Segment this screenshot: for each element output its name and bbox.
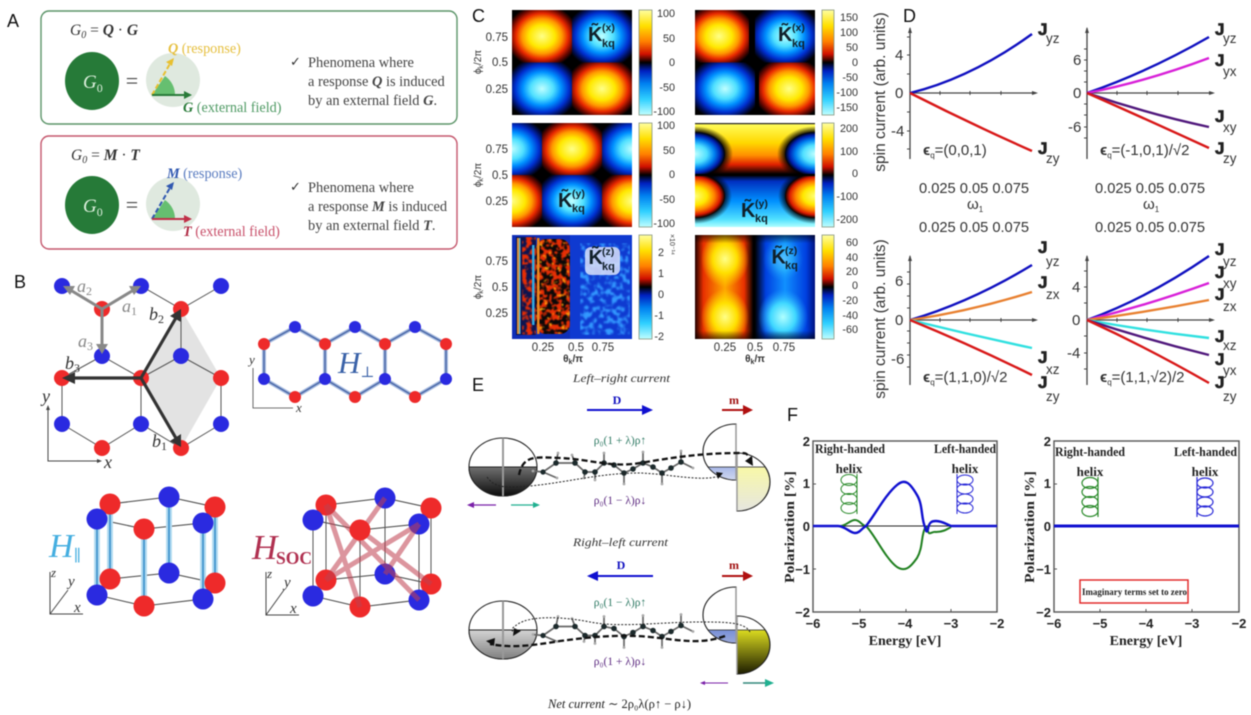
- card: electric-type response: =: [86, 22, 103, 39]
- left-right current diagram: D: [613, 393, 622, 407]
- heatmap: K y, left: K̃: [558, 188, 573, 212]
- plot: eq (-1,0,1)/sqrt2: [1068, 20, 1237, 166]
- plot: eq (1,1,0)/sqrt2: zy: [1046, 389, 1060, 404]
- omega tick labels and axis: 1: [979, 205, 984, 214]
- phi axis titles: k: [478, 65, 485, 69]
- H parallel bilayer: z: [50, 565, 56, 580]
- polarization plot, full: 1: [803, 476, 810, 491]
- card: magnetic-type response: 0: [97, 205, 103, 219]
- plot: eq (-1,0,1)/sqrt2: yz: [1223, 31, 1237, 46]
- polarization plot, imaginary terms zero: −2: [1036, 605, 1051, 620]
- H perpendicular lattice: [247, 321, 452, 415]
- plot: eq (0,0,1): -4: [891, 123, 904, 140]
- colorbar labels: 50: [663, 145, 675, 157]
- colorbar labels: 100: [657, 8, 675, 20]
- honeycomb lattice with lattice vectors: 2: [158, 312, 164, 326]
- plot: eq (-1,0,1)/sqrt2: yx: [1223, 64, 1237, 79]
- card: electric-type response: G (external field): [183, 100, 282, 116]
- card: magnetic-type response: by an external field T.: [308, 218, 435, 234]
- plot: eq (-1,0,1)/sqrt2: -6: [1068, 119, 1081, 136]
- plot: eq (0,0,1): 4: [895, 47, 903, 64]
- colorbar labels: -1: [654, 310, 664, 322]
- omega tick labels and axis: 0.025 0.05 0.075: [919, 219, 1029, 236]
- C axes labels: 0.5: [492, 57, 508, 69]
- colorbar labels: 0: [852, 168, 858, 180]
- phi axis titles: ϕ: [473, 294, 484, 299]
- colorbar labels: 40: [846, 252, 858, 264]
- net current formula: Net current ∼ 2ρ₀λ(ρ↑ − ρ↓): [547, 697, 691, 711]
- colorbar labels: 0: [669, 169, 675, 181]
- plot: eq (1,1,0)/sqrt2: q: [930, 378, 935, 387]
- card: electric-type response: G: [70, 22, 81, 39]
- colorbar labels: 20: [846, 266, 858, 278]
- H parallel bilayer: y: [66, 574, 75, 590]
- polarization plot, full: −5: [852, 616, 866, 631]
- plot: eq (1,1,sqrt2)/2: =(1,1,√2)/2: [1112, 369, 1184, 386]
- polarization plot, imaginary terms zero: −5: [1093, 616, 1107, 631]
- colorbar labels: 100: [657, 120, 675, 132]
- plot: eq (1,1,sqrt2)/2: J: [1215, 263, 1224, 282]
- honeycomb lattice with lattice vectors: 1: [131, 304, 137, 318]
- plot: eq (1,1,0)/sqrt2: 0: [895, 312, 903, 329]
- plot: eq (1,1,sqrt2)/2: 4: [1072, 279, 1080, 296]
- colorbar labels: -50: [659, 82, 675, 94]
- colorbars: [639, 10, 834, 339]
- plot: eq (1,1,sqrt2)/2: ϵ: [1100, 369, 1107, 386]
- phi axis titles: [473, 50, 485, 299]
- card: electric-type response: =: [126, 68, 138, 93]
- theta axis titles: /π: [572, 354, 583, 365]
- colorbar labels: -200: [836, 214, 858, 226]
- omega tick labels and axis: ω: [967, 196, 979, 213]
- label F: F: [787, 405, 798, 425]
- heatmap: K z, right: (z): [785, 245, 797, 257]
- C axes labels: 0.5: [492, 282, 508, 294]
- honeycomb lattice with lattice vectors: 3: [74, 361, 80, 375]
- theta axis titles: /π: [754, 354, 765, 365]
- plot: eq (1,1,0)/sqrt2: J: [1038, 273, 1047, 292]
- theta axis titles: [563, 354, 765, 366]
- left-right current diagram: ρ₀(1 + λ)ρ↑: [594, 435, 646, 447]
- plot: eq (1,1,sqrt2)/2: zx: [1223, 299, 1237, 314]
- plot: eq (0,0,1): =(0,0,1): [935, 142, 987, 159]
- plot: eq (0,0,1): J: [1038, 139, 1047, 158]
- card: electric-type response: 0: [97, 81, 103, 95]
- left-right current diagram: [467, 371, 770, 511]
- polarization plot, imaginary terms zero: −4: [1139, 616, 1154, 631]
- colorbar labels: -100: [653, 106, 675, 118]
- heatmap: K y, right: [694, 122, 816, 228]
- heatmap: K x, right: K̃: [778, 22, 793, 46]
- polarization plot, full: −2: [990, 616, 1004, 631]
- phi axis titles: k: [478, 178, 485, 182]
- plot: eq (0,0,1): [891, 20, 1060, 166]
- heatmap: K x, left: K̃: [588, 22, 603, 46]
- colorbar labels: -40: [842, 310, 858, 322]
- colorbar labels: [653, 8, 858, 343]
- polarization plot, full: Right-handed: [815, 441, 886, 456]
- C axes labels: 0.75: [486, 32, 508, 44]
- C axes labels: 0.25: [486, 196, 508, 208]
- plot: eq (0,0,1): J: [1038, 20, 1047, 39]
- label E: E: [472, 375, 484, 395]
- colorbar labels: 0: [658, 289, 664, 301]
- card: electric-type response: Q (response): [168, 41, 241, 57]
- card: magnetic-type response: T (external field): [183, 224, 280, 240]
- heatmap: K x, right: (x): [792, 22, 805, 34]
- colorbar labels: -50: [842, 72, 858, 84]
- colorbar labels: -20: [842, 295, 858, 307]
- polarization plot, full: −4: [898, 616, 913, 631]
- honeycomb lattice with lattice vectors: [40, 276, 229, 472]
- card: magnetic-type response: [41, 136, 457, 249]
- heatmap: K z, right: kq: [785, 260, 798, 272]
- phi axis titles: /2π: [473, 50, 484, 65]
- card: electric-type response: [41, 11, 457, 124]
- plot: eq (-1,0,1)/sqrt2: q: [1107, 151, 1112, 160]
- card: magnetic-type response: a response M is induced: [308, 199, 447, 215]
- plot: eq (-1,0,1)/sqrt2: =(-1,0,1)/√2: [1112, 142, 1190, 159]
- C axes labels: 0.25: [486, 308, 508, 320]
- phi axis titles: ϕ: [473, 182, 484, 187]
- plot: eq (-1,0,1)/sqrt2: 6: [1073, 52, 1081, 69]
- card: magnetic-type response: G: [83, 196, 97, 217]
- card: electric-type response: G: [83, 72, 97, 93]
- card: magnetic-type response: ✓: [290, 180, 301, 195]
- colorbar labels: 0: [852, 280, 858, 292]
- heatmap: K y, left: kq: [572, 203, 585, 215]
- card: electric-type response: 0: [81, 30, 86, 41]
- theta axis titles: θ: [563, 354, 569, 365]
- polarization plot, full: helix: [836, 461, 863, 476]
- phi axis titles: /2π: [473, 163, 484, 178]
- polarization plot, full: −2: [795, 605, 810, 620]
- polarization plot, imaginary terms zero: −6: [1047, 616, 1061, 631]
- colorbar labels: -100: [836, 87, 858, 99]
- heatmap: K x, right: [694, 9, 816, 116]
- colorbar labels: 200: [840, 123, 858, 135]
- plot: eq (1,1,sqrt2)/2: zy: [1223, 389, 1237, 404]
- colorbar labels: 150: [840, 12, 858, 24]
- colorbar labels: 60: [846, 237, 858, 249]
- heatmap: K x, right: kq: [792, 38, 805, 50]
- honeycomb lattice with lattice vectors: b: [65, 353, 74, 373]
- plot: eq (1,1,sqrt2)/2: yx: [1223, 363, 1237, 378]
- heatmap: K y, right: kq: [755, 213, 768, 225]
- plot: eq (-1,0,1)/sqrt2: J: [1215, 107, 1224, 126]
- honeycomb lattice with lattice vectors: 2: [86, 284, 92, 298]
- plot: eq (-1,0,1)/sqrt2: J: [1215, 139, 1224, 158]
- plot: eq (0,0,1): ϵ: [923, 142, 930, 159]
- omega tick labels and axis: 1: [1155, 205, 1160, 214]
- heatmap: K z, right: [694, 234, 816, 340]
- theta axis labels: 0.75: [773, 342, 795, 354]
- card: magnetic-type response: M · T: [104, 147, 140, 164]
- heatmap: K z, noisy: [511, 234, 633, 340]
- H perpendicular lattice: ⊥: [360, 365, 374, 381]
- colorbar labels: -50: [659, 194, 675, 206]
- heatmap: K x, left: (x): [602, 22, 615, 34]
- right-left current diagram: m: [729, 558, 739, 572]
- card: electric-type response: a response Q is induced: [308, 74, 445, 90]
- right-left current diagram: Right–left current: [572, 535, 669, 549]
- H spin-orbit coupling bilayer: x: [289, 601, 297, 617]
- panel E: [467, 371, 774, 711]
- polarization plot, full: 0: [803, 519, 810, 534]
- honeycomb lattice with lattice vectors: a: [77, 276, 86, 296]
- polarization plot, imaginary terms zero: −1: [1036, 562, 1051, 577]
- honeycomb lattice with lattice vectors: y: [40, 386, 50, 406]
- card: electric-type response: Q · G: [103, 22, 138, 39]
- C axes labels: 0.5: [492, 170, 508, 182]
- plot: eq (-1,0,1)/sqrt2: 0: [1073, 85, 1081, 102]
- plot: eq (-1,0,1)/sqrt2: J: [1215, 51, 1224, 70]
- plot: eq (0,0,1): q: [930, 151, 935, 160]
- card: electric-type response: Phenomena where: [308, 55, 414, 71]
- panel B: [14, 272, 452, 618]
- polarization plot, full: Energy [eV]: [869, 634, 941, 649]
- left-right current diagram: m: [729, 393, 739, 407]
- theta axis labels: 0.75: [592, 342, 614, 354]
- H parallel bilayer: H: [49, 528, 74, 565]
- honeycomb lattice with lattice vectors: 3: [87, 339, 93, 353]
- plot: eq (-1,0,1)/sqrt2: xy: [1223, 120, 1237, 135]
- omega tick labels and axis: 0.025 0.05 0.075: [919, 180, 1029, 197]
- polarization plot, full: −3: [944, 616, 958, 631]
- honeycomb lattice with lattice vectors: a: [78, 331, 87, 351]
- colorbar labels: 50: [846, 42, 858, 54]
- polarization plot, full: 2: [803, 434, 810, 449]
- plot: eq (1,1,0)/sqrt2: J: [1038, 238, 1047, 257]
- plot: eq (1,1,0)/sqrt2: [891, 238, 1060, 404]
- theta axis labels: 0.5: [747, 342, 763, 354]
- H perpendicular lattice: x: [295, 400, 302, 415]
- y axis titles: [872, 12, 889, 399]
- panel C: [472, 6, 858, 366]
- theta axis labels: [532, 342, 795, 354]
- plot: eq (1,1,0)/sqrt2: =(1,1,0)/√2: [935, 369, 1008, 386]
- polarization plot, imaginary terms zero: Polarization [%]: [1022, 471, 1037, 583]
- label C: C: [472, 6, 485, 26]
- colorbar labels: 100: [840, 27, 858, 39]
- right-left current diagram: [469, 535, 774, 687]
- heatmap: K z, right: K̃: [772, 245, 786, 268]
- card: magnetic-type response: =: [87, 147, 104, 164]
- plot: eq (1,1,0)/sqrt2: yz: [1046, 254, 1060, 269]
- panel F: [782, 405, 1246, 649]
- plot: eq (0,0,1): zy: [1046, 151, 1060, 166]
- C axes labels: 0.75: [486, 144, 508, 156]
- plot: eq (1,1,sqrt2)/2: q: [1107, 378, 1112, 387]
- plot: eq (1,1,0)/sqrt2: 6: [895, 273, 903, 290]
- H perpendicular lattice: y: [247, 352, 255, 367]
- plot: eq (1,1,0)/sqrt2: -6: [891, 351, 904, 368]
- label B: B: [14, 272, 26, 292]
- y axis titles: spin current (arb. units): [872, 12, 889, 172]
- phi axis titles: ϕ: [473, 69, 484, 74]
- right-left current diagram: ρ₀(1 − λ)ρ↑: [594, 597, 646, 609]
- C axes labels: [486, 32, 508, 320]
- right-left current diagram: ρ₀(1 + λ)ρ↓: [594, 656, 646, 668]
- heatmap: K x, left: [511, 9, 633, 116]
- heatmap: K y, right: (y): [755, 198, 768, 210]
- heatmap: K z, noisy: K̃: [588, 245, 604, 269]
- plot: eq (1,1,0)/sqrt2: J: [1038, 373, 1047, 392]
- plot: eq (1,1,0)/sqrt2: J: [1038, 348, 1047, 367]
- plot: eq (-1,0,1)/sqrt2: J: [1215, 20, 1224, 39]
- plot: eq (0,0,1): 0: [895, 85, 903, 102]
- polarization plot, imaginary terms zero: 2: [1044, 434, 1051, 449]
- card: magnetic-type response: Phenomena where: [308, 180, 414, 196]
- omega tick labels and axis: 0.025 0.05 0.075: [1095, 219, 1205, 236]
- card: electric-type response: ✓: [290, 55, 301, 70]
- plot: eq (1,1,sqrt2)/2: J: [1215, 327, 1224, 346]
- polarization plot, imaginary terms zero: Imaginary terms set to zero: [1082, 587, 1187, 597]
- polarization plot, full: −6: [806, 616, 820, 631]
- honeycomb lattice with lattice vectors: b: [149, 304, 158, 324]
- heatmap: K y, left: (y): [572, 188, 585, 200]
- left-right current diagram: ρ₀(1 − λ)ρ↓: [594, 495, 646, 507]
- polarization plot, full: Left-handed: [934, 441, 997, 456]
- plot: eq (1,1,sqrt2)/2: xz: [1223, 338, 1237, 353]
- polarization plot, full: [782, 434, 1004, 649]
- omega tick labels and axis: ω: [1143, 196, 1155, 213]
- H parallel bilayer: [48, 486, 226, 616]
- polarization plot, full: helix: [952, 461, 979, 476]
- heatmap: K y, left: [511, 122, 633, 228]
- H spin-orbit coupling bilayer: y: [282, 575, 291, 591]
- heatmap: K x, left: kq: [602, 38, 615, 50]
- honeycomb lattice with lattice vectors: a: [122, 296, 131, 316]
- colorbar labels: -60: [842, 324, 858, 336]
- phi axis titles: /2π: [473, 275, 484, 290]
- polarization plot, imaginary terms zero: helix: [1077, 464, 1104, 479]
- polarization plot, imaginary terms zero: [1022, 434, 1246, 649]
- y axis titles: spin current (arb. units): [872, 239, 889, 399]
- colorbar labels: -100: [836, 191, 858, 203]
- omega tick labels and axis: [919, 180, 1205, 236]
- card: magnetic-type response: 0: [82, 155, 87, 166]
- colorbar labels: 0: [852, 57, 858, 69]
- polarization plot, full: −1: [795, 562, 810, 577]
- card: magnetic-type response: G: [71, 147, 82, 164]
- H spin-orbit coupling bilayer: z: [266, 566, 272, 581]
- phi axis titles: k: [478, 290, 485, 294]
- honeycomb lattice with lattice vectors: b: [152, 431, 161, 451]
- H parallel bilayer: x: [73, 600, 81, 616]
- heatmap: K z, noisy: (z): [602, 246, 614, 258]
- colorbar labels: -2: [654, 331, 664, 343]
- heatmap: K z, noisy: kq: [602, 261, 615, 273]
- theta axis titles: k: [569, 359, 573, 366]
- plot: eq (1,1,sqrt2)/2: J: [1215, 285, 1224, 304]
- theta axis labels: 0.25: [532, 342, 554, 354]
- label A: A: [7, 11, 19, 31]
- plot: eq (1,1,sqrt2)/2: 0: [1072, 312, 1080, 329]
- colorbar labels: -100: [653, 218, 675, 230]
- theta axis titles: k: [751, 359, 755, 366]
- panel C: ×10⁻¹⁴: [668, 234, 675, 255]
- polarization plot, imaginary terms zero: −3: [1185, 616, 1199, 631]
- colorbar labels: 50: [663, 33, 675, 45]
- card: electric-type response: by an external field G.: [308, 93, 437, 109]
- colorbar labels: -150: [836, 102, 858, 114]
- colorbar labels: 0: [669, 57, 675, 69]
- polarization plot, full: Polarization [%]: [782, 471, 797, 583]
- honeycomb lattice with lattice vectors: x: [103, 452, 112, 472]
- plot: eq (1,1,0)/sqrt2: xz: [1046, 362, 1060, 377]
- plot: eq (0,0,1): yz: [1046, 31, 1060, 46]
- polarization plot, imaginary terms zero: Left-handed: [1174, 444, 1238, 459]
- polarization plot, imaginary terms zero: Right-handed: [1055, 444, 1126, 459]
- H spin-orbit coupling bilayer: [251, 488, 442, 618]
- H perpendicular lattice: H: [338, 345, 360, 380]
- polarization plot, imaginary terms zero: 1: [1044, 476, 1051, 491]
- plot: eq (-1,0,1)/sqrt2: ϵ: [1100, 142, 1107, 159]
- colorbar labels: 2: [658, 247, 664, 259]
- right-left current diagram: D: [617, 558, 626, 572]
- polarization plot, imaginary terms zero: helix: [1192, 464, 1219, 479]
- plot: eq (-1,0,1)/sqrt2: zy: [1223, 151, 1237, 166]
- panel D: [872, 6, 1237, 404]
- plot: eq (1,1,sqrt2)/2: -4: [1067, 345, 1080, 362]
- polarization plot, imaginary terms zero: 0: [1044, 519, 1051, 534]
- card: magnetic-type response: M (response): [166, 166, 243, 182]
- plot: eq (1,1,sqrt2)/2: xy: [1223, 276, 1237, 291]
- plot: eq (1,1,sqrt2)/2: J: [1215, 350, 1224, 369]
- plot: eq (1,1,0)/sqrt2: zx: [1046, 287, 1060, 302]
- theta axis labels: 0.25: [714, 342, 736, 354]
- heatmap: K y, right: K̃: [741, 198, 756, 222]
- colorbar labels: 1: [658, 268, 664, 280]
- plot: eq (1,1,sqrt2)/2: J: [1215, 373, 1224, 392]
- theta axis titles: θ: [745, 354, 751, 365]
- label D: D: [903, 6, 916, 26]
- H parallel bilayer: ∥: [74, 547, 81, 565]
- H spin-orbit coupling bilayer: SOC: [276, 548, 312, 568]
- C axes labels: 0.25: [486, 84, 508, 96]
- plot: eq (1,1,sqrt2)/2: yz: [1223, 254, 1237, 269]
- polarization plot, imaginary terms zero: Energy [eV]: [1110, 634, 1182, 649]
- omega tick labels and axis: 0.025 0.05 0.075: [1095, 180, 1205, 197]
- colorbar labels: 100: [840, 146, 858, 158]
- card: magnetic-type response: =: [126, 192, 138, 217]
- polarization plot, imaginary terms zero: −2: [1232, 616, 1246, 631]
- panel A: [7, 11, 457, 249]
- plot: eq (1,1,sqrt2)/2: J: [1215, 240, 1224, 259]
- plot: eq (1,1,sqrt2)/2: [1067, 240, 1237, 404]
- H spin-orbit coupling bilayer: H: [251, 528, 279, 567]
- honeycomb lattice with lattice vectors: 1: [161, 439, 167, 453]
- C axes labels: 0.75: [486, 256, 508, 268]
- plot: eq (1,1,0)/sqrt2: ϵ: [923, 369, 930, 386]
- left-right current diagram: Left–right current: [572, 371, 671, 385]
- theta axis labels: 0.5: [568, 342, 584, 354]
